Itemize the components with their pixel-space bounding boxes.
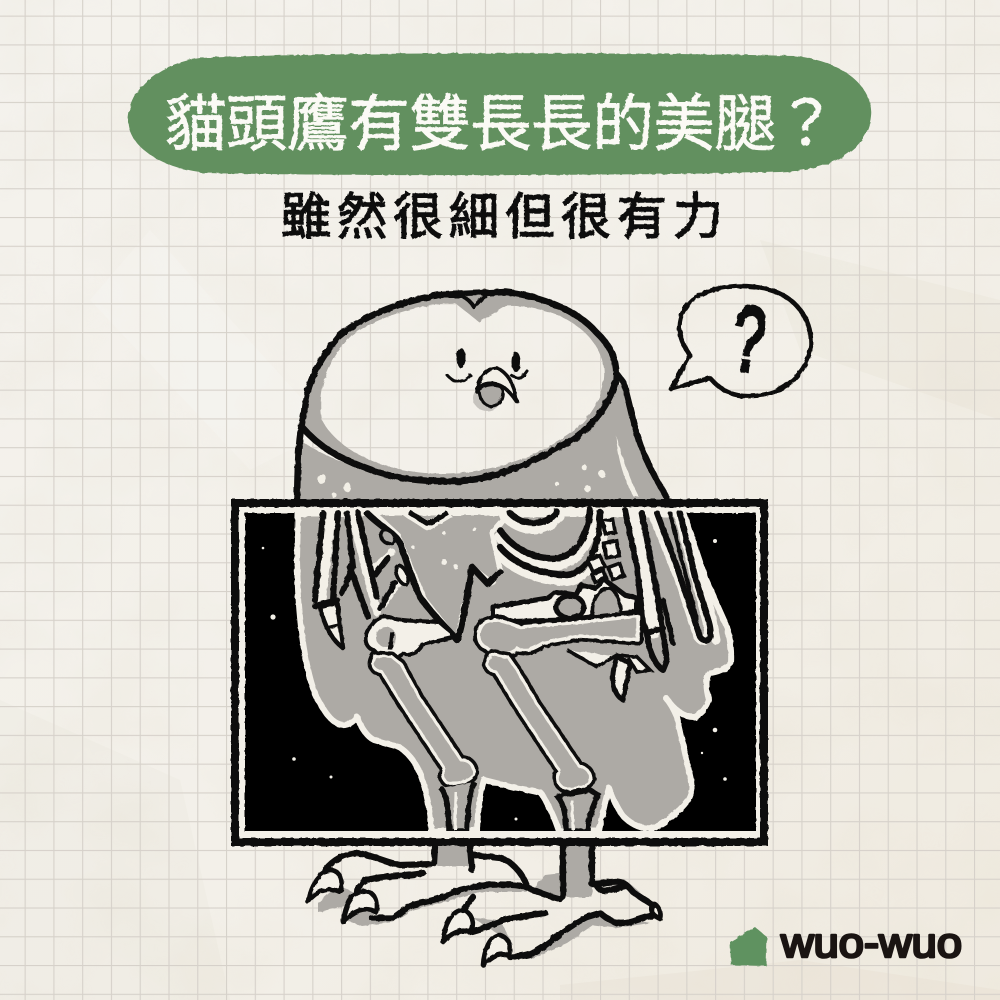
chest edge [367,513,500,640]
window lower cream strip [245,831,756,837]
left eye [456,348,466,368]
ribcage ladder [588,519,624,582]
body fill above window [298,383,668,500]
title text: 貓頭鷹有雙長長的美腿？ [165,90,837,159]
brand logo [730,919,962,966]
left femur [369,620,450,655]
body silhouette [297,514,731,831]
chest feathers [374,513,505,640]
beak shadow [473,385,501,411]
claw highlights [308,870,661,965]
left lower leg [441,782,474,831]
head shadow crescent [302,292,616,481]
x-ray skeleton [297,510,731,831]
brand name: wuo-wuo [780,919,962,966]
forehead notch [440,295,486,307]
rib arcs [498,510,606,582]
head outline [297,292,616,498]
left feather lines [315,513,395,617]
small oval bones [378,527,398,547]
owl upper body and head [297,292,668,500]
foot shadows [318,873,563,926]
right femur [479,616,638,654]
right eye [512,352,520,372]
lower leg highlights [455,792,573,830]
body speckles [316,464,606,498]
speech bubble with question mark [671,286,811,396]
subtitle: 雖然很細但很有力 [281,189,723,245]
feet and claws [232,838,767,965]
right lower leg [558,790,598,831]
left wing claw [320,603,343,648]
right wing feathers [625,510,716,670]
right body outline [618,375,667,498]
right leg stub [564,846,592,897]
right eye lid [511,371,527,378]
left wing feathers [315,513,400,648]
left leg stub [437,846,470,866]
window frame [235,503,764,842]
right feather cream shapes [632,513,653,632]
question mark: ? [728,288,770,393]
face [447,348,527,411]
banner pill [128,53,871,175]
right tibia [487,654,591,789]
left tibia [373,656,474,783]
beak lower [479,385,503,406]
hanging claw [613,657,630,700]
left feather highlights [322,513,331,600]
right feather lines [625,510,647,633]
window dark interior [245,513,756,832]
chest collar [406,512,450,526]
x-ray window [235,503,764,842]
jagged wing tip [567,650,650,672]
title banner [128,53,871,175]
window bottom black edge [232,838,767,845]
beak [477,368,517,402]
body light streak [616,436,639,497]
chest speckles [411,527,476,569]
left eye lid [447,375,470,382]
foot outlines [325,847,653,957]
hand bones cluster [493,580,637,622]
icon: house [730,927,767,966]
stars [262,512,738,820]
